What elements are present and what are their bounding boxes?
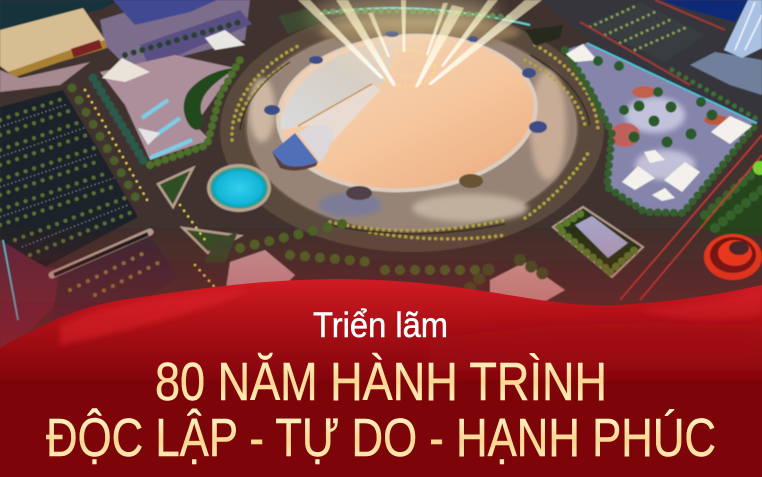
subtitle: Triển lãm: [313, 306, 448, 345]
triangular lawns: [158, 168, 240, 253]
right tree patch: [620, 135, 762, 300]
light beams: [298, 0, 542, 87]
aerial exhibition complex illustration: [0, 0, 762, 370]
domed exhibition hall: [264, 25, 547, 201]
red ribbon banner: [0, 279, 762, 477]
ring road and plaza around dome: [220, 8, 604, 252]
water pool: [207, 164, 271, 212]
left garden plaza: [93, 22, 245, 165]
light dots on the dome: [379, 50, 435, 86]
lower garden and trees: [180, 205, 565, 310]
right event plaza: [565, 43, 757, 213]
small entrance pods: [264, 31, 547, 200]
parking lot left: [0, 88, 178, 360]
title line 1: 80 NĂM HÀNH TRÌNH: [155, 352, 607, 412]
white wing of the roof: [281, 38, 402, 130]
entrance capsule: [272, 125, 332, 171]
rectangular garden pond: [553, 207, 643, 277]
top left building and lavender plaza: [0, 0, 252, 92]
hot air balloon: [704, 234, 762, 280]
right parking and tower: [540, 0, 762, 125]
